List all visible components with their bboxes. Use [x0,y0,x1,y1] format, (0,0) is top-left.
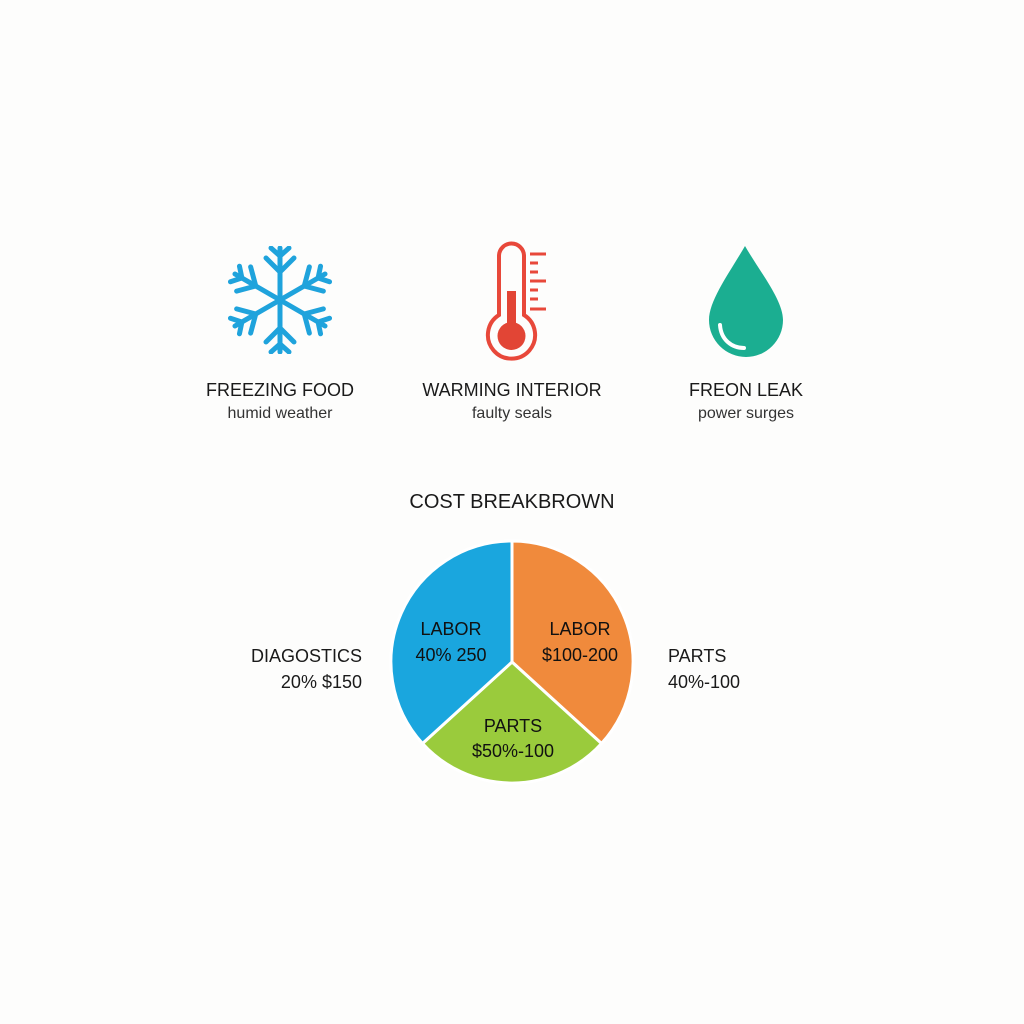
label: freon leak: FREON LEAK [689,380,803,400]
label: freezing food: humid weather [228,405,332,422]
icon: thermometer [486,242,546,361]
label: freon leak [689,380,803,422]
pie chart: 40% 250 [415,645,487,665]
pie chart: $50%-100 [472,741,554,761]
label: parts: PARTS [668,646,726,666]
pie chart: LABOR [420,619,482,639]
label: parts: 40%-100 [668,672,740,692]
label: diagnostics: DIAGOSTICS [251,646,362,666]
pie chart: LABOR [549,619,611,639]
label: diagnostics [251,646,362,692]
label: warming interior [422,380,602,422]
label: freezing food [206,380,354,422]
label: diagnostics: 20% $150 [281,672,362,692]
icon: drop [709,246,783,357]
label: parts [668,646,740,692]
heading: cost breakdown: COST BREAKBROWN [409,491,615,513]
pie chart: $100-200 [542,645,618,665]
label: freon leak: power surges [698,405,794,422]
pie chart [392,542,632,782]
pie chart: PARTS [484,716,542,736]
icon: snowflake [228,246,332,354]
label: warming interior: WARMING INTERIOR [422,380,602,400]
label: warming interior: faulty seals [472,405,552,422]
label: freezing food: FREEZING FOOD [206,380,354,400]
